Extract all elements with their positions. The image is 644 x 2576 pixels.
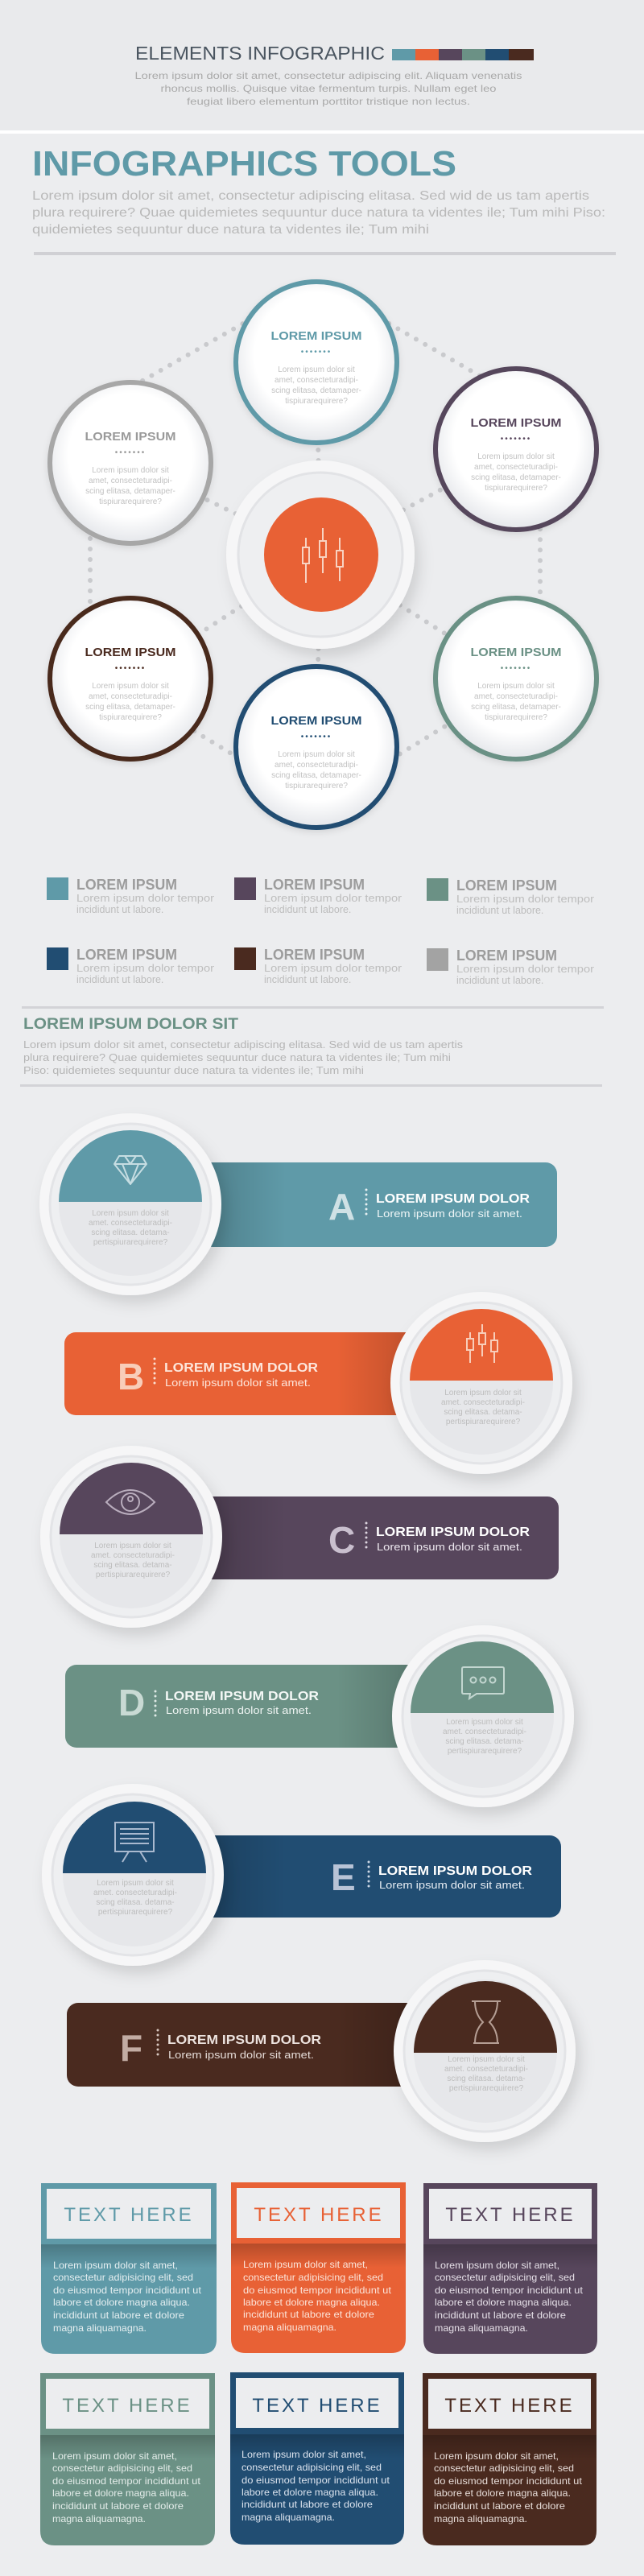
item F: Lorem ipsum dolor sit amet. bbox=[168, 2049, 314, 2061]
section heading: LOREM IPSUM DOLOR SIT bbox=[23, 1016, 238, 1033]
card: sage: Lorem ipsum dolor sit amet, bbox=[52, 2450, 177, 2462]
circle: brown: amet, consecteturadipi- bbox=[89, 692, 172, 701]
circle: purple: scing elitasa, detamaper- bbox=[471, 473, 561, 482]
circle: sage: amet, consecteturadipi- bbox=[474, 692, 558, 701]
card: purple bbox=[423, 2183, 597, 2354]
dotted connectors bbox=[90, 282, 540, 805]
card: navy: labore et dolore magna aliqua. bbox=[242, 2487, 378, 2498]
item D: D bbox=[118, 1682, 145, 1724]
legend item teal bbox=[47, 877, 214, 915]
item C: LOREM IPSUM DOLOR bbox=[376, 1525, 530, 1539]
circle: navy bbox=[236, 667, 397, 828]
card: orange bbox=[231, 2182, 406, 2353]
item D bbox=[65, 1625, 574, 1807]
item B: scing elitasa. detama- bbox=[444, 1408, 522, 1417]
circle: sage: scing elitasa, detamaper- bbox=[471, 703, 561, 712]
card: sage: magna aliquamagna. bbox=[52, 2513, 146, 2524]
section paragraph: Lorem ipsum dolor sit amet, consectetur adipiscing elitasa. Sed wid de us tam apertis bbox=[23, 1039, 463, 1051]
item C: amet. consecteturadipi- bbox=[91, 1551, 175, 1560]
header subtitle bbox=[135, 70, 522, 107]
item F: scing elitasa. detama- bbox=[447, 2074, 526, 2083]
card: brown: incididunt ut labore et dolore bbox=[434, 2500, 565, 2512]
card: purple: magna aliquamagna. bbox=[435, 2322, 528, 2334]
card: teal: consectetur adipisicing elit, sed bbox=[53, 2272, 193, 2283]
card: brown: labore et dolore magna aliqua. bbox=[434, 2487, 571, 2499]
card: sage: TEXT HERE bbox=[62, 2395, 192, 2417]
header subtitle: rhoncus mollis. Quisque vitae fermentum turpis. Nullam eget leo bbox=[161, 83, 497, 94]
legend item sage: incididunt ut labore. bbox=[456, 905, 543, 916]
section paragraph bbox=[23, 1039, 463, 1076]
item D: Lorem ipsum dolor sit bbox=[446, 1718, 523, 1727]
circle: teal: tispiurarequirere? bbox=[285, 397, 348, 406]
card: sage: labore et dolore magna aliqua. bbox=[52, 2487, 189, 2499]
circle: purple: Lorem ipsum dolor sit bbox=[477, 452, 555, 461]
card: brown: magna aliquamagna. bbox=[434, 2513, 527, 2524]
card: navy: TEXT HERE bbox=[252, 2395, 382, 2417]
circle: navy: scing elitasa, detamaper- bbox=[271, 771, 361, 780]
legend item sage: Lorem ipsum dolor tempor bbox=[456, 894, 594, 905]
item F: LOREM IPSUM DOLOR bbox=[167, 2033, 321, 2047]
legend item purple bbox=[234, 877, 402, 915]
legend item brown bbox=[234, 947, 402, 985]
card: teal: magna aliquamagna. bbox=[53, 2322, 147, 2334]
icon: sliders bbox=[467, 1324, 497, 1363]
card: orange: do eiusmod tempor incididunt ut bbox=[243, 2285, 392, 2296]
card: purple: incididunt ut labore et dolore bbox=[435, 2310, 566, 2321]
card: purple: do eiusmod tempor incididunt ut bbox=[435, 2285, 584, 2296]
card: orange: TEXT HERE bbox=[254, 2204, 384, 2226]
legend item grey: LOREM IPSUM bbox=[456, 947, 557, 964]
item B: B bbox=[118, 1356, 144, 1397]
circle: brown: tispiurarequirere? bbox=[99, 713, 162, 722]
circle: brown: ••••••• bbox=[115, 664, 146, 673]
item D: amet. consecteturadipi- bbox=[443, 1728, 526, 1736]
card: sage: consectetur adipisicing elit, sed bbox=[52, 2462, 192, 2474]
card: navy: magna aliquamagna. bbox=[242, 2512, 335, 2523]
circle: teal: amet, consecteturadipi- bbox=[275, 376, 358, 385]
item E: Lorem ipsum dolor sit amet. bbox=[379, 1879, 525, 1891]
legend item brown: incididunt ut labore. bbox=[264, 974, 351, 985]
legend item teal: Lorem ipsum dolor tempor bbox=[76, 893, 214, 904]
item F: F bbox=[120, 2027, 142, 2069]
item C: pertispiurarequirere? bbox=[96, 1571, 171, 1579]
circle: purple: ••••••• bbox=[501, 435, 531, 444]
header subtitle: Lorem ipsum dolor sit amet, consectetur adipiscing elit. Aliquam venenatis bbox=[135, 70, 522, 81]
circle: brown: scing elitasa, detamaper- bbox=[85, 703, 175, 712]
circle: grey: LOREM IPSUM bbox=[85, 430, 175, 444]
intro paragraph: plura requirere? Quae quidemietes sequuntur duce natura ta videntes ile; Tum mihi Piso: bbox=[32, 206, 605, 220]
icon: presentation board bbox=[115, 1823, 154, 1862]
legend item navy bbox=[47, 947, 214, 985]
item E: Lorem ipsum dolor sit bbox=[97, 1879, 174, 1888]
icon: hourglass bbox=[472, 2001, 501, 2043]
circle: purple: LOREM IPSUM bbox=[470, 416, 562, 430]
legend item brown: Lorem ipsum dolor tempor bbox=[264, 963, 402, 974]
card: orange: consectetur adipisicing elit, sed bbox=[243, 2272, 383, 2283]
item A: pertispiurarequirere? bbox=[93, 1238, 168, 1247]
circle: teal: scing elitasa, detamaper- bbox=[271, 386, 361, 395]
legend bbox=[47, 877, 594, 986]
circle: grey: amet, consecteturadipi- bbox=[89, 477, 172, 485]
card: sage bbox=[40, 2373, 215, 2545]
card: teal bbox=[41, 2183, 217, 2354]
item F bbox=[67, 1960, 576, 2142]
circle: sage: ••••••• bbox=[501, 664, 531, 673]
item A: amet. consecteturadipi- bbox=[89, 1219, 172, 1228]
circle: brown bbox=[50, 598, 211, 759]
item A: Lorem ipsum dolor sit bbox=[92, 1209, 169, 1218]
circle: navy: ••••••• bbox=[301, 733, 332, 741]
item E: scing elitasa. detama- bbox=[96, 1898, 175, 1907]
card: navy: consectetur adipisicing elit, sed bbox=[242, 2462, 382, 2473]
item A: LOREM IPSUM DOLOR bbox=[376, 1192, 530, 1206]
legend item navy: LOREM IPSUM bbox=[76, 947, 177, 963]
intro paragraph: Lorem ipsum dolor sit amet, consectetur adipiscing elitasa. Sed wid de us tam apertis bbox=[32, 189, 589, 203]
card: brown bbox=[423, 2373, 597, 2545]
circle: sage: tispiurarequirere? bbox=[485, 713, 547, 722]
circle: grey bbox=[50, 382, 211, 543]
icon: sliders bbox=[303, 528, 343, 583]
item B: pertispiurarequirere? bbox=[446, 1418, 521, 1426]
item E: LOREM IPSUM DOLOR bbox=[378, 1864, 532, 1878]
legend item sage: LOREM IPSUM bbox=[456, 877, 557, 894]
circle: purple: tispiurarequirere? bbox=[485, 484, 547, 493]
card: brown: consectetur adipisicing elit, sed bbox=[434, 2462, 574, 2474]
card: sage: do eiusmod tempor incididunt ut bbox=[52, 2475, 201, 2487]
section paragraph: plura requirere? Quae quidemietes sequuntur duce natura ta videntes ile; Tum mihi bbox=[23, 1052, 451, 1063]
legend item purple: Lorem ipsum dolor tempor bbox=[264, 893, 402, 904]
item F: pertispiurarequirere? bbox=[449, 2084, 524, 2093]
main title: INFOGRAPHICS TOOLS bbox=[32, 144, 456, 184]
circle: grey: tispiurarequirere? bbox=[99, 497, 162, 506]
circle: navy: Lorem ipsum dolor sit bbox=[278, 750, 355, 759]
circle: purple bbox=[436, 369, 597, 530]
header title: ELEMENTS INFOGRAPHIC bbox=[135, 43, 385, 64]
card: teal: incididunt ut labore et dolore bbox=[53, 2310, 184, 2321]
item B: LOREM IPSUM DOLOR bbox=[164, 1361, 318, 1375]
item C: scing elitasa. detama- bbox=[93, 1561, 172, 1570]
item C: C bbox=[328, 1519, 355, 1561]
card: navy: incididunt ut labore et dolore bbox=[242, 2499, 373, 2510]
card: navy bbox=[230, 2372, 404, 2545]
icon: eye bbox=[106, 1490, 155, 1514]
colour swatches bbox=[392, 49, 534, 60]
card: purple: labore et dolore magna aliqua. bbox=[435, 2297, 572, 2308]
item C bbox=[40, 1446, 559, 1628]
card: navy: do eiusmod tempor incididunt ut bbox=[242, 2475, 390, 2486]
circle: grey: scing elitasa, detamaper- bbox=[85, 487, 175, 496]
legend item purple: incididunt ut labore. bbox=[264, 904, 351, 915]
legend item navy: Lorem ipsum dolor tempor bbox=[76, 963, 214, 974]
item E: pertispiurarequirere? bbox=[98, 1908, 173, 1917]
circle: teal: LOREM IPSUM bbox=[270, 329, 362, 343]
circle: navy: tispiurarequirere? bbox=[285, 782, 348, 791]
card: teal: TEXT HERE bbox=[64, 2204, 194, 2226]
legend item brown: LOREM IPSUM bbox=[264, 947, 365, 963]
legend item sage bbox=[427, 877, 594, 916]
item B: Lorem ipsum dolor sit bbox=[444, 1389, 522, 1397]
item B: Lorem ipsum dolor sit amet. bbox=[165, 1377, 311, 1389]
card: orange: labore et dolore magna aliqua. bbox=[243, 2297, 380, 2308]
circle: grey: Lorem ipsum dolor sit bbox=[92, 466, 169, 475]
item D: pertispiurarequirere? bbox=[448, 1747, 522, 1756]
item D: LOREM IPSUM DOLOR bbox=[165, 1690, 319, 1703]
circle: navy: LOREM IPSUM bbox=[270, 714, 362, 728]
item A bbox=[39, 1113, 557, 1295]
item C: Lorem ipsum dolor sit bbox=[94, 1542, 171, 1550]
card: brown: do eiusmod tempor incididunt ut bbox=[434, 2475, 583, 2487]
card: sage: incididunt ut labore et dolore bbox=[52, 2500, 184, 2512]
centre hub bbox=[226, 460, 415, 649]
item D: Lorem ipsum dolor sit amet. bbox=[166, 1704, 312, 1716]
circle: brown: LOREM IPSUM bbox=[85, 646, 175, 659]
intro paragraph bbox=[32, 189, 605, 237]
circle: teal: Lorem ipsum dolor sit bbox=[278, 365, 355, 374]
hexagon diagram bbox=[50, 282, 597, 828]
circle: brown: Lorem ipsum dolor sit bbox=[92, 682, 169, 691]
item F: Lorem ipsum dolor sit bbox=[448, 2055, 525, 2064]
item D: scing elitasa. detama- bbox=[445, 1737, 524, 1746]
section paragraph: Piso: quidemietes sequuntur duce natura ta videntes ile; Tum mihi bbox=[23, 1065, 364, 1076]
card: brown: TEXT HERE bbox=[444, 2395, 575, 2417]
legend item purple: LOREM IPSUM bbox=[264, 877, 365, 893]
intro paragraph: quidemietes sequuntur duce natura ta videntes ile; Tum mihi bbox=[32, 223, 429, 237]
legend item teal: incididunt ut labore. bbox=[76, 904, 163, 915]
icon: chat bubble bbox=[462, 1667, 504, 1699]
item C: Lorem ipsum dolor sit amet. bbox=[377, 1541, 522, 1553]
item F: amet. consecteturadipi- bbox=[444, 2065, 528, 2074]
legend item teal: LOREM IPSUM bbox=[76, 877, 177, 893]
item B bbox=[64, 1292, 572, 1474]
item A: scing elitasa. detama- bbox=[91, 1228, 170, 1237]
card: purple: TEXT HERE bbox=[445, 2204, 576, 2226]
card: teal: do eiusmod tempor incididunt ut bbox=[53, 2285, 202, 2296]
icon: diamond bbox=[114, 1156, 147, 1184]
circle: sage: LOREM IPSUM bbox=[470, 646, 562, 659]
circle: navy: amet, consecteturadipi- bbox=[275, 761, 358, 770]
item A: Lorem ipsum dolor sit amet. bbox=[377, 1208, 522, 1220]
circle: grey: ••••••• bbox=[115, 448, 146, 457]
circle: sage bbox=[436, 598, 597, 759]
legend item grey: incididunt ut labore. bbox=[456, 975, 543, 986]
legend item grey bbox=[427, 947, 594, 986]
card: purple: consectetur adipisicing elit, sed bbox=[435, 2272, 575, 2283]
card: brown: Lorem ipsum dolor sit amet, bbox=[434, 2450, 559, 2462]
item E: amet. consecteturadipi- bbox=[93, 1889, 177, 1897]
card: navy: Lorem ipsum dolor sit amet, bbox=[242, 2449, 366, 2460]
card: teal: Lorem ipsum dolor sit amet, bbox=[53, 2260, 178, 2271]
card: purple: Lorem ipsum dolor sit amet, bbox=[435, 2260, 559, 2271]
header title bbox=[135, 43, 534, 64]
circle: purple: amet, consecteturadipi- bbox=[474, 463, 558, 472]
circle: sage: Lorem ipsum dolor sit bbox=[477, 682, 555, 691]
card: teal: labore et dolore magna aliqua. bbox=[53, 2297, 190, 2308]
legend item navy: incididunt ut labore. bbox=[76, 974, 163, 985]
legend item grey: Lorem ipsum dolor tempor bbox=[456, 964, 594, 975]
card: orange: incididunt ut labore et dolore bbox=[243, 2309, 374, 2320]
item E bbox=[42, 1784, 561, 1966]
circle: teal bbox=[236, 282, 397, 443]
item E: E bbox=[331, 1856, 356, 1898]
item A: A bbox=[328, 1186, 355, 1228]
item B: amet. consecteturadipi- bbox=[441, 1398, 525, 1407]
header subtitle: feugiat libero elementum porttitor tristique non lectus. bbox=[187, 96, 470, 107]
card: orange: magna aliquamagna. bbox=[243, 2322, 336, 2333]
circle: teal: ••••••• bbox=[301, 348, 332, 357]
card: orange: Lorem ipsum dolor sit amet, bbox=[243, 2259, 368, 2270]
